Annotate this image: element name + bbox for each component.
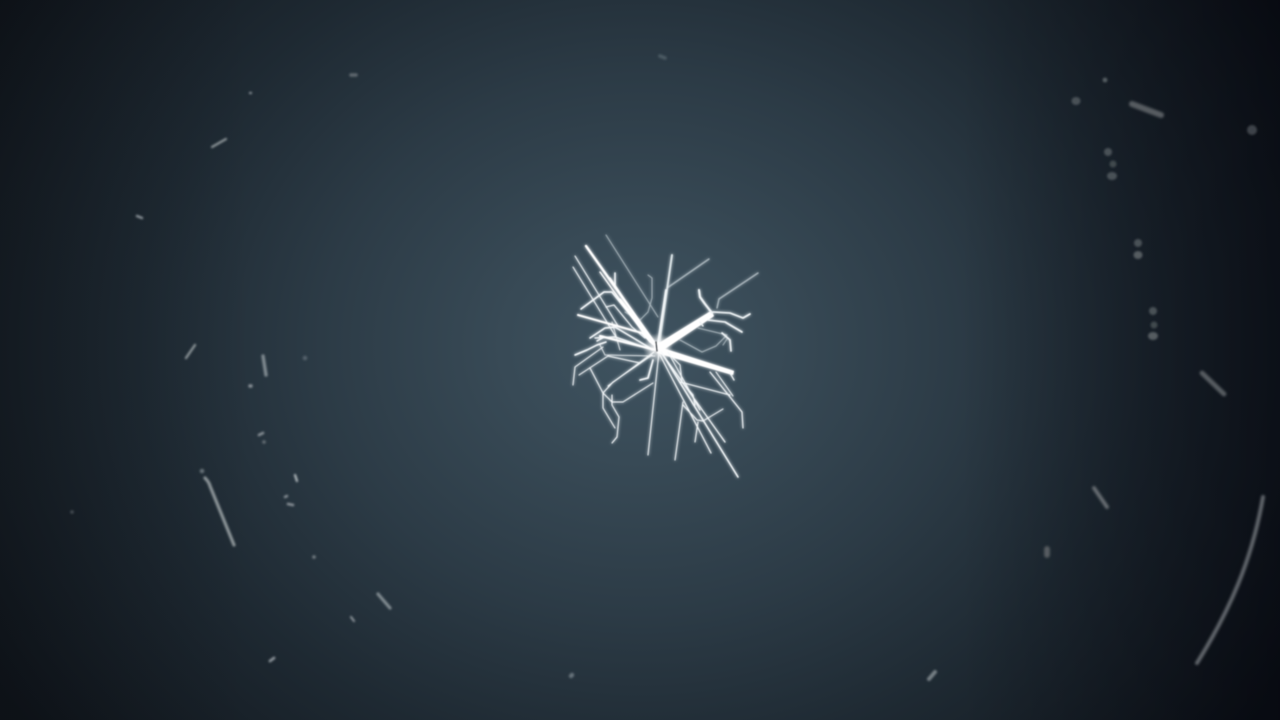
arm: lower right taper (656, 346, 734, 375)
arm: upper right taper (656, 311, 714, 352)
right debris dots (1072, 78, 1257, 340)
right debris particles (1047, 104, 1263, 663)
burst: faint outer lines (606, 235, 758, 352)
burst: thick upper-left strokes (578, 246, 656, 350)
burst: right arm twigs (699, 290, 750, 351)
burst: lower branches (590, 350, 743, 477)
branching light burst (573, 235, 758, 477)
burst: upper-left branches (573, 255, 672, 385)
burst: hot core (643, 333, 673, 363)
left debris particles (72, 56, 935, 679)
